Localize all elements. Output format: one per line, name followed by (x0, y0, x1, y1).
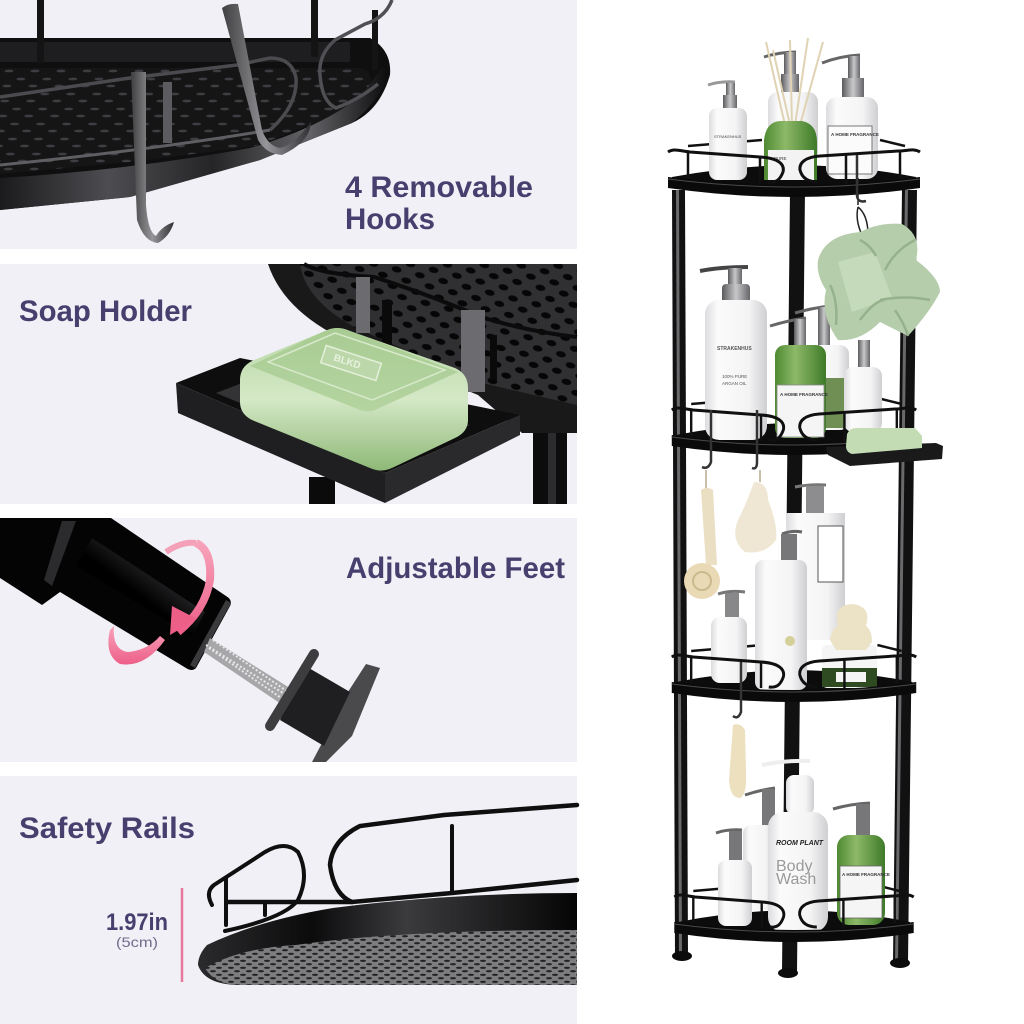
product: corner shelf tower (668, 38, 943, 978)
heading: 4 Removable Hooks: Hooks (345, 203, 435, 236)
hanging bath brushes (684, 470, 776, 798)
tray with hooks (0, 0, 392, 243)
heading: 4 Removable Hooks: 4 Removable (345, 171, 533, 204)
hook right (222, 4, 311, 155)
panel: soap holder (0, 264, 577, 504)
tier 3 bottles (711, 485, 877, 690)
foot cylinder (0, 518, 231, 670)
pink rotation arrow (108, 543, 210, 664)
tier 2 bottles: A HOME FRAGRANCE (780, 392, 828, 397)
pink rotation arrow back (166, 543, 196, 552)
soap bar (240, 328, 468, 470)
tier 2 bottles (700, 267, 882, 440)
tier 1 bottles (708, 38, 879, 180)
panel: 4 removable hooks (0, 0, 577, 249)
heading: Soap Holder: Soap Holder (19, 295, 192, 328)
threaded bolt (204, 638, 293, 706)
panel: safety rails (0, 776, 577, 1024)
small hooks on rails (702, 155, 866, 717)
soap dish (176, 358, 520, 503)
round tray (198, 893, 577, 985)
hook and loofah (818, 178, 940, 340)
rubber foot pad (270, 654, 380, 762)
dimension label: (5cm) (116, 935, 158, 950)
shelf trays back (672, 140, 916, 931)
safety rails (209, 805, 577, 931)
tier 4 bottles: ROOM PLANT (776, 840, 824, 847)
dimension label: 1.97in (106, 909, 168, 936)
hook left (131, 72, 174, 243)
shelf posts (672, 190, 917, 978)
soap bar: BLKD (332, 353, 362, 372)
heading: 4 Removable Hooks (345, 171, 533, 236)
heading: Safety Rails: Safety Rails (19, 812, 195, 845)
tier 4 bottles (716, 761, 890, 932)
tier 1 bottles: STRAKENHUS (714, 134, 742, 139)
dimension line (181, 888, 183, 982)
tier 2 bottles: 100% PURE (722, 374, 747, 379)
tray corner and legs (268, 264, 577, 504)
tier 4 bottles: Body (776, 858, 812, 875)
shelf rims and rails (668, 150, 920, 942)
panel: adjustable feet (0, 518, 577, 762)
tier 2 bottles: STRAKENHUS (717, 346, 752, 352)
heading: Adjustable Feet: Adjustable Feet (346, 552, 565, 585)
tier 1 bottles: A HOME FRAGRANCE (831, 132, 879, 137)
dimension label (106, 909, 168, 950)
tier 4 bottles: Wash (776, 871, 816, 888)
tier 1 bottles: PURE (774, 156, 787, 161)
soap shelf on tier 2 (826, 428, 943, 466)
tier 2 bottles: ARGAN OIL (722, 381, 747, 386)
tier 4 bottles: A HOME FRAGRANCE (842, 872, 890, 877)
